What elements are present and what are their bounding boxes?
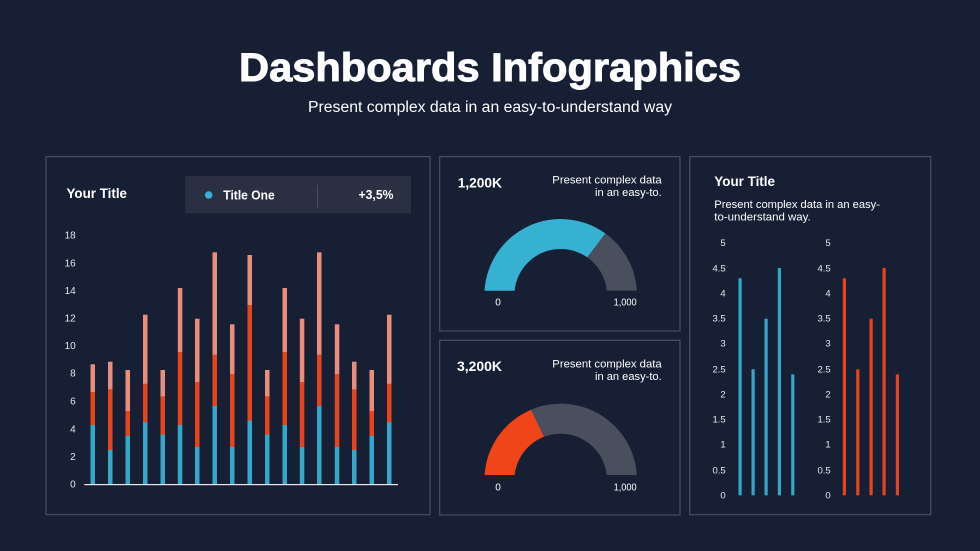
left y axis labels: 1 (720, 440, 726, 451)
y axis labels: 10 (65, 341, 76, 352)
gauge value: 1,200K (458, 174, 502, 190)
gauge description (552, 174, 663, 199)
right y axis labels: 4 (825, 288, 831, 299)
right y axis labels: 2.5 (817, 365, 831, 376)
gauge description: Present complex data (552, 358, 663, 370)
legend dot (205, 191, 212, 199)
left y axis labels (712, 238, 726, 501)
left y axis labels: 1.5 (712, 415, 726, 426)
y axis labels (65, 231, 76, 491)
y axis labels: 6 (70, 397, 76, 408)
gauge description: in an easy-to. (595, 187, 662, 199)
left y axis labels: 0 (720, 490, 726, 501)
subtitle: Present complex data in an easy-to-understand way (308, 99, 672, 116)
right y axis labels: 0 (825, 490, 831, 501)
right y axis labels: 3.5 (817, 314, 831, 325)
legend value: +3,5% (358, 188, 394, 202)
gauge description: in an easy-to. (595, 371, 662, 383)
y axis labels: 18 (65, 231, 76, 242)
y axis labels: 4 (70, 424, 76, 435)
right y axis labels: 0.5 (817, 465, 831, 476)
right y axis labels: 1 (825, 440, 831, 451)
left y axis labels: 0.5 (712, 465, 726, 476)
left y axis labels: 5 (720, 238, 726, 249)
y axis labels: 0 (70, 480, 76, 491)
gauge max label: 1,000 (614, 298, 637, 309)
panel: paired bar charts (690, 157, 931, 515)
gauge value: 3,200K (457, 358, 502, 374)
gauge chart: orange (485, 404, 637, 475)
panel: stacked bar chart (46, 157, 430, 515)
right y axis labels: 4.5 (817, 263, 831, 274)
y axis labels: 2 (70, 452, 76, 463)
y axis labels: 12 (65, 314, 76, 325)
panel heading: Your Title (714, 173, 775, 189)
legend box (185, 176, 411, 213)
left y axis labels: 4 (720, 288, 726, 299)
right y axis labels: 5 (825, 238, 831, 249)
y axis labels: 16 (65, 258, 76, 269)
gauge min label: 0 (495, 298, 501, 309)
title: Dashboards Infographics (239, 46, 741, 90)
left y axis labels: 4.5 (712, 263, 726, 274)
gauge chart: blue (484, 219, 637, 291)
gauge description (552, 358, 663, 383)
y axis labels: 14 (65, 286, 76, 297)
panel: gauge two (440, 340, 680, 515)
y axis labels: 8 (70, 369, 76, 380)
legend label: Title One (223, 188, 275, 202)
blue bars (738, 268, 794, 495)
left y axis labels: 3.5 (712, 314, 726, 325)
stacked bars (90, 252, 392, 484)
right y axis labels: 2 (825, 389, 831, 400)
x axis line (84, 484, 398, 485)
panel description: Present complex data in an easy- (714, 199, 880, 211)
right y axis labels (817, 238, 831, 501)
right y axis labels: 1.5 (817, 415, 831, 426)
panel description (714, 199, 880, 224)
panel description: to-understand way. (714, 212, 811, 224)
left y axis labels: 2 (720, 389, 726, 400)
panel: gauge one (440, 157, 680, 331)
right y axis labels: 3 (825, 339, 831, 350)
gauge description: Present complex data (552, 174, 663, 186)
red bars (843, 268, 899, 495)
panel heading: Your Title (66, 185, 127, 201)
left y axis labels: 2.5 (712, 365, 726, 376)
gauge min label: 0 (495, 483, 501, 494)
left y axis labels: 3 (720, 339, 726, 350)
gauge max label: 1,000 (614, 483, 637, 494)
